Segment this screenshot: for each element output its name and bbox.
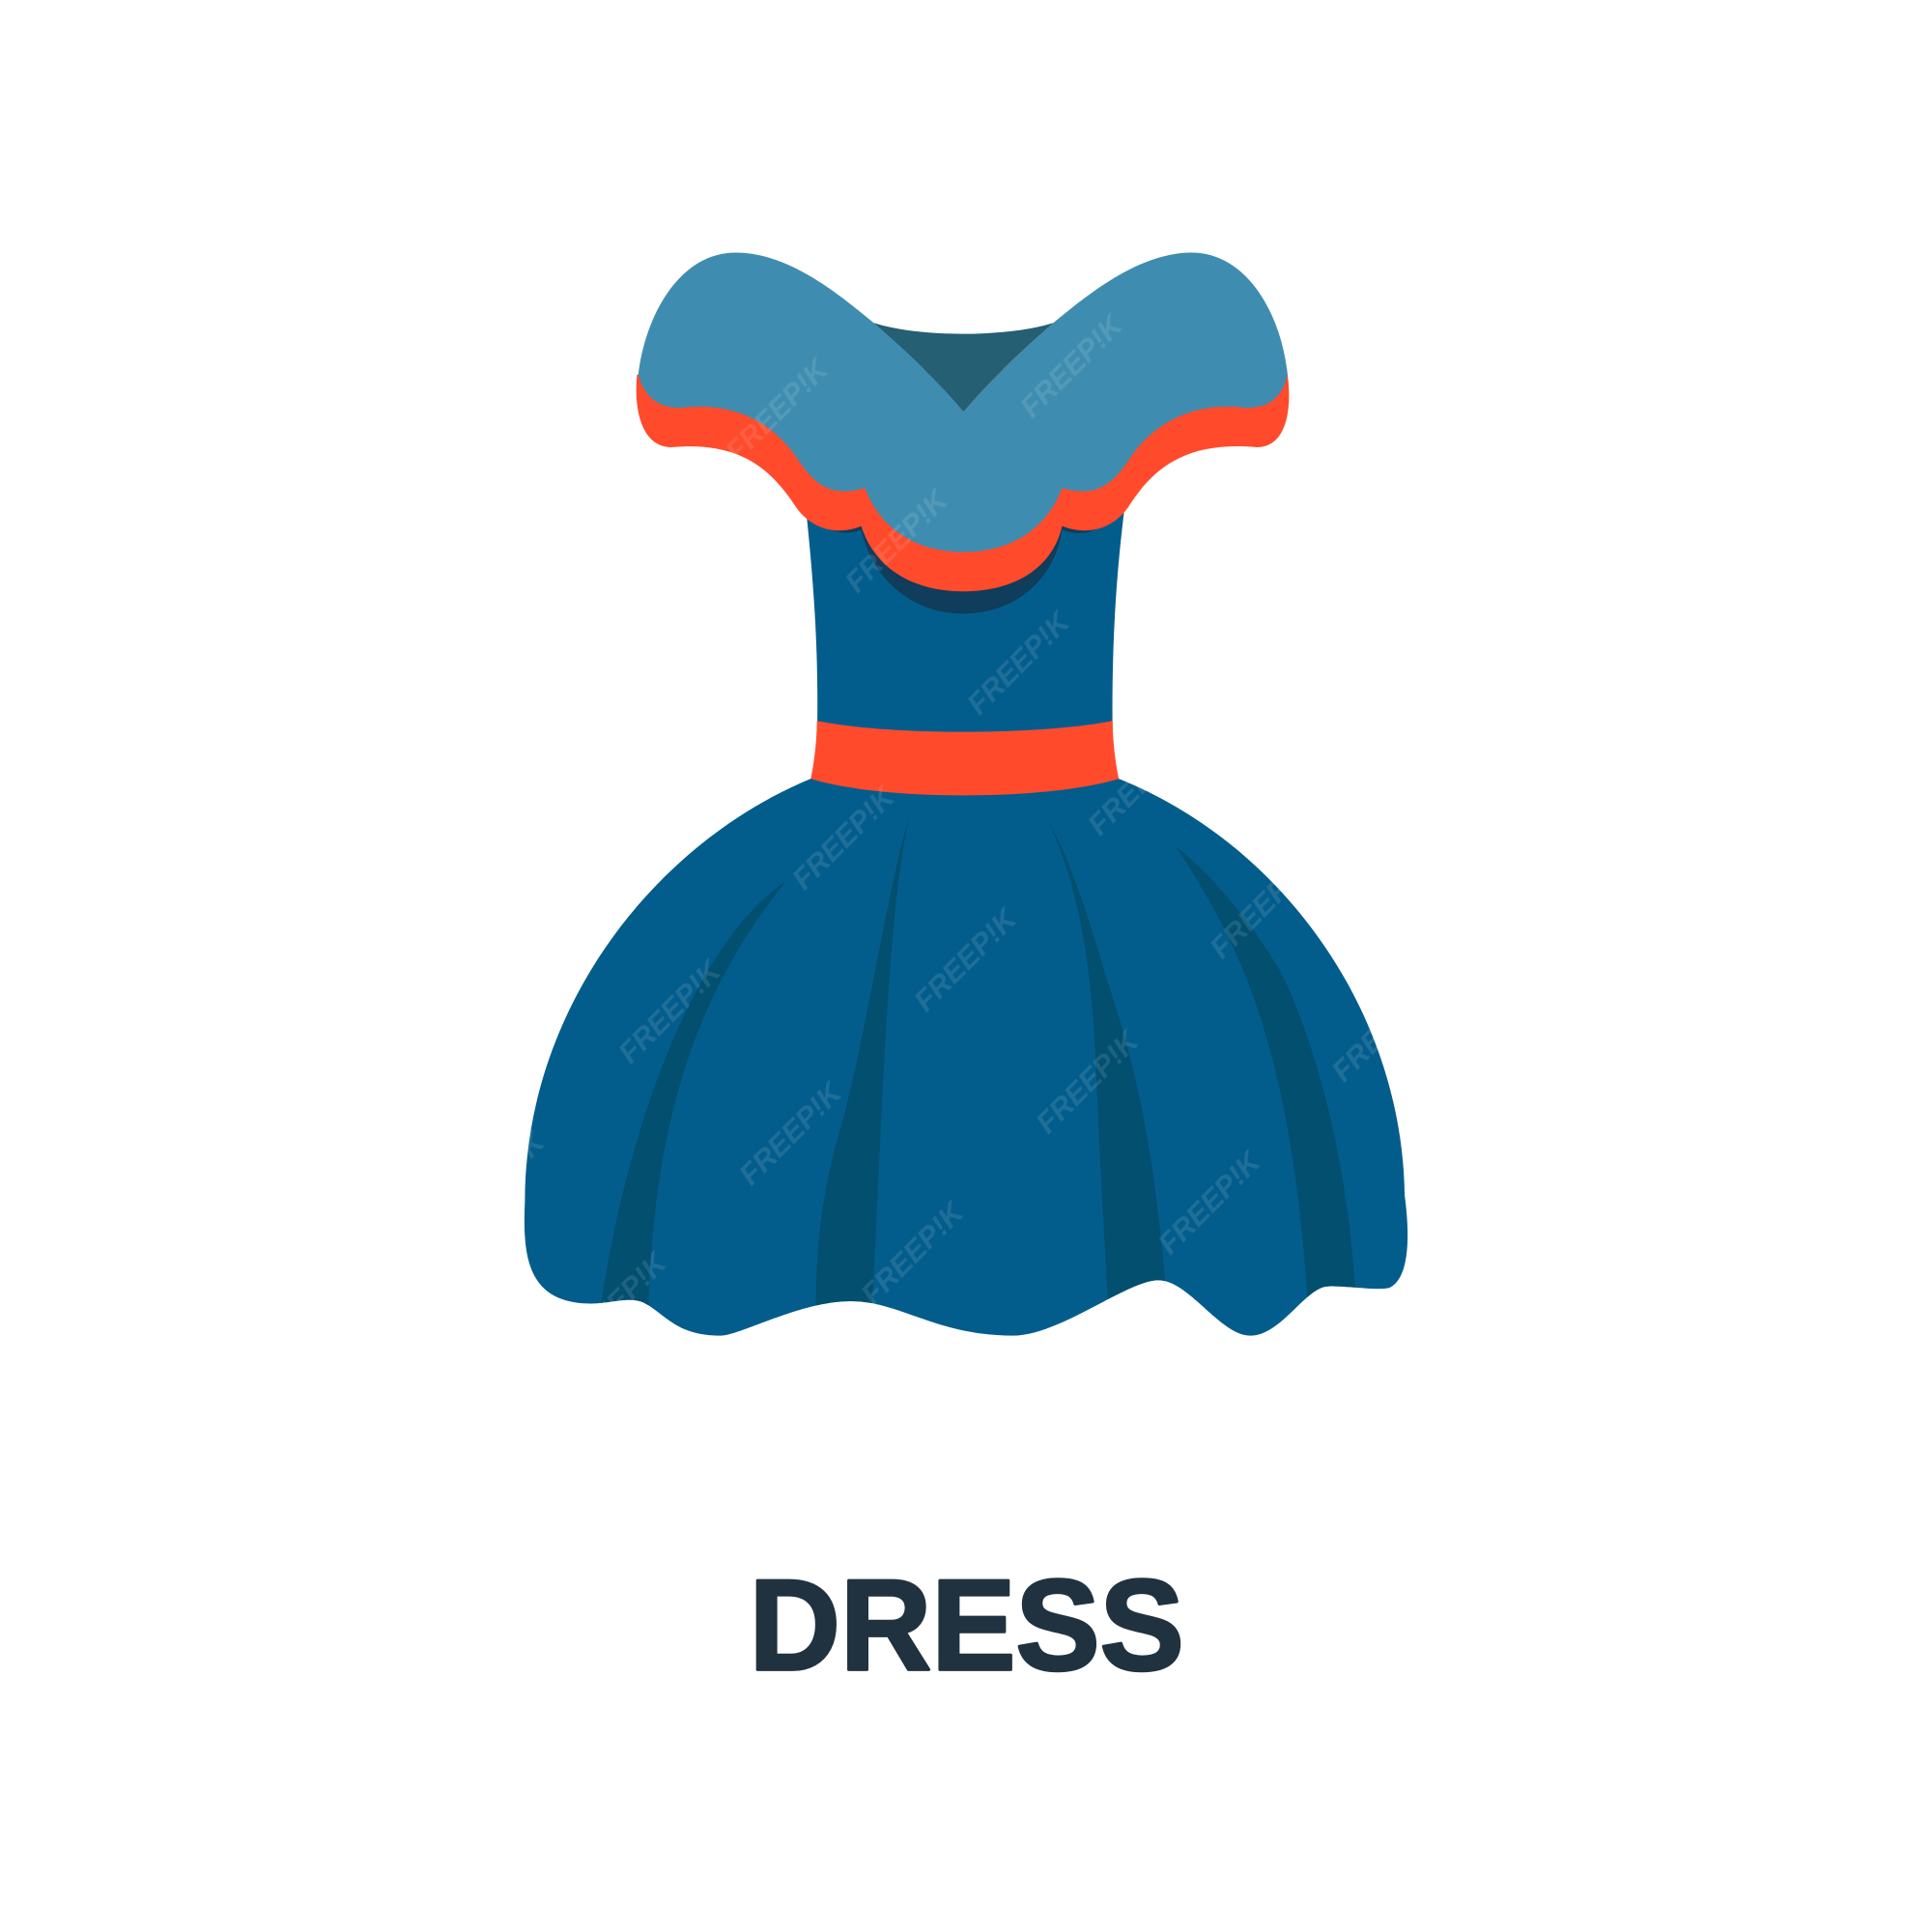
dress bodice <box>806 496 1126 742</box>
watermarks: FREEP!K <box>720 352 836 469</box>
red collar trim <box>637 370 1289 591</box>
icon: dress <box>524 253 1408 1336</box>
watermarks: FREEP!K <box>961 605 1077 721</box>
watermarks: FREEP!K <box>558 1245 674 1362</box>
collar shadow <box>806 469 1125 613</box>
watermarks: FREEP!K <box>612 953 728 1069</box>
watermarks: FREEP!K <box>1204 849 1320 965</box>
watermarks: FREEP!K <box>855 1195 971 1311</box>
watermarks: FREEP!K <box>908 901 1024 1018</box>
light blue collar <box>639 252 1288 552</box>
neckline inner <box>873 323 1054 412</box>
watermarks: FREEP!K <box>1325 972 1442 1088</box>
dress skirt <box>525 779 1407 1336</box>
title: DRESS <box>750 1553 1184 1697</box>
skirt folds <box>599 817 1356 1319</box>
watermarks: FREEP!K <box>436 1124 553 1241</box>
watermarks: FREEP!K <box>733 1075 849 1192</box>
watermarks: FREEP!K <box>838 483 955 599</box>
watermarks: FREEP!K <box>1151 1145 1268 1261</box>
watermarks: FREEP!K <box>1030 1024 1146 1140</box>
watermarks: FREEP!K <box>786 780 902 895</box>
watermarks <box>436 308 1442 1362</box>
watermarks: FREEP!K <box>1082 725 1198 841</box>
watermarks: FREEP!K <box>1013 308 1130 424</box>
waist belt <box>810 721 1119 795</box>
